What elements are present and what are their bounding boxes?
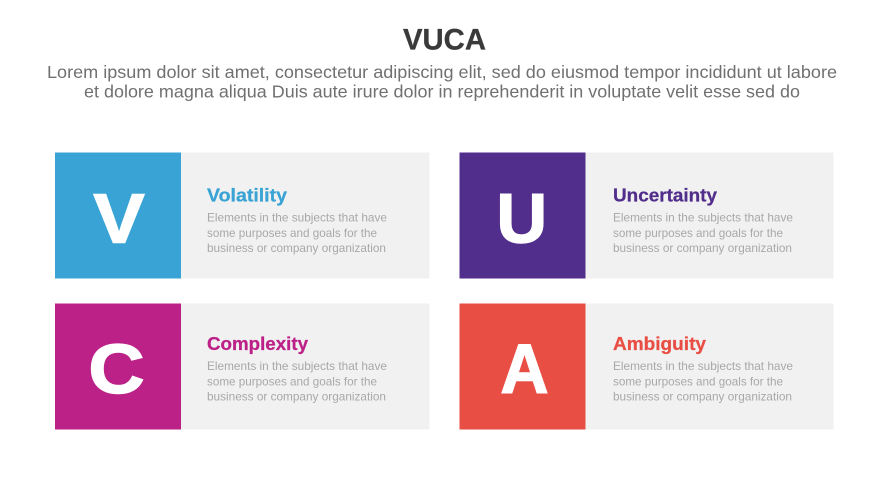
text block: complexity description xyxy=(207,359,387,404)
text block: complexity description: some purposes and goals for the xyxy=(207,374,377,388)
panel: volatility xyxy=(55,152,430,278)
text block: complexity description: business or company organization xyxy=(207,390,386,404)
text block: volatility description: Elements in the subjects that have xyxy=(207,210,387,224)
panel: uncertainty xyxy=(460,152,834,278)
icon: letter U block: U xyxy=(496,179,547,257)
icon: letter A block: A xyxy=(500,330,548,408)
text block: ambiguity description: business or company organization xyxy=(613,390,792,404)
heading: Uncertainty: Uncertainty xyxy=(613,186,717,206)
text block: ambiguity description xyxy=(613,359,793,404)
text block: volatility description: some purposes and goals for the xyxy=(207,226,377,240)
text block: uncertainty description: business or company organization xyxy=(613,241,792,255)
heading: Volatility: Volatility xyxy=(207,186,287,206)
icon: letter C block xyxy=(55,304,181,430)
text block: uncertainty description xyxy=(613,210,793,255)
text block: volatility description: business or company organization xyxy=(207,241,386,255)
icon: letter V block xyxy=(55,152,181,278)
icon: letter V block: V xyxy=(94,179,145,257)
subtitle text: Lorem ipsum dolor sit amet, consectetur adipiscing elit, sed do eiusmod tempor incididunt ut labore xyxy=(47,62,837,82)
panel: ambiguity xyxy=(460,304,834,430)
text block: ambiguity description: Elements in the subjects that have xyxy=(613,359,793,373)
panel: complexity xyxy=(55,304,430,430)
title: VUCA xyxy=(403,24,486,56)
text block: uncertainty description: Elements in the subjects that have xyxy=(613,210,793,224)
icon: letter U block xyxy=(460,152,586,278)
icon: letter C block: C xyxy=(88,330,144,408)
text block: volatility description xyxy=(207,210,387,255)
text block: complexity description: Elements in the subjects that have xyxy=(207,359,387,373)
heading: Ambiguity: Ambiguity xyxy=(613,334,706,354)
icon: letter A block xyxy=(460,304,586,430)
text block: ambiguity description: some purposes and goals for the xyxy=(613,374,783,388)
text block: uncertainty description: some purposes and goals for the xyxy=(613,226,783,240)
subtitle text xyxy=(47,62,837,102)
subtitle text: et dolore magna aliqua Duis aute irure dolor in reprehenderit in voluptate velit esse sed do xyxy=(84,82,800,102)
heading: Complexity: Complexity xyxy=(207,334,308,354)
